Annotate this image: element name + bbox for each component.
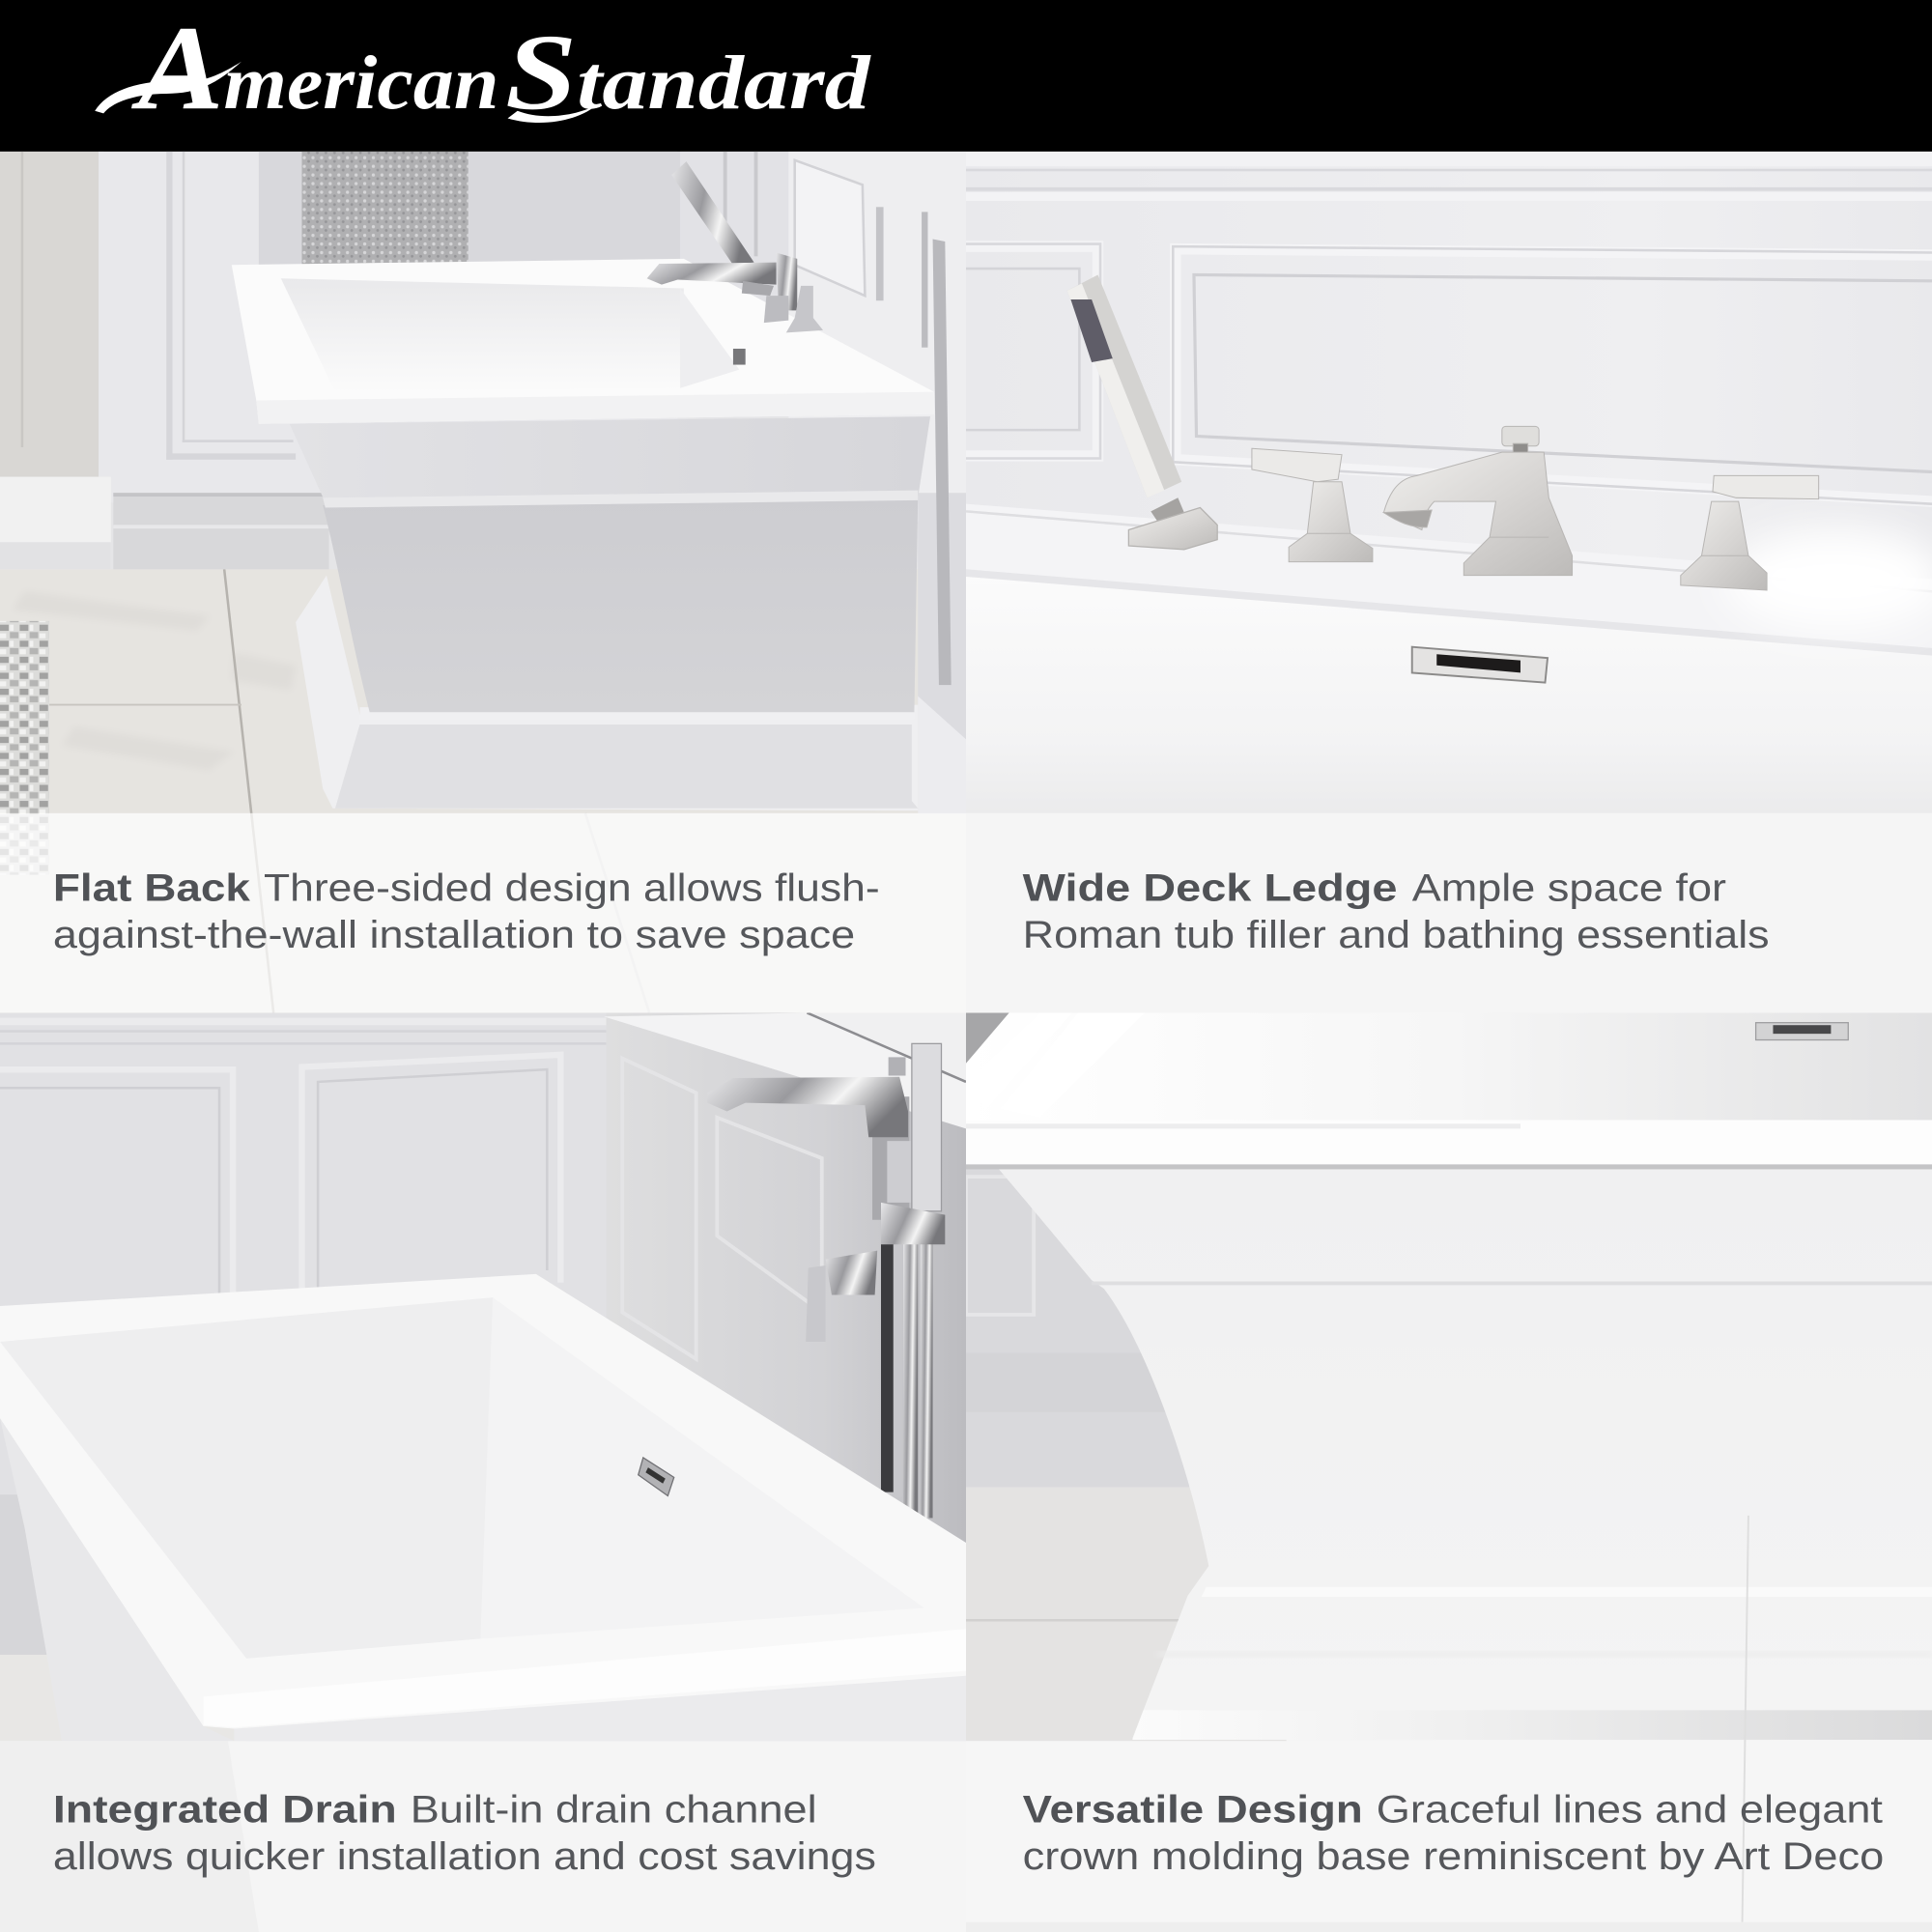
- step: [0, 477, 110, 542]
- caption: wide deck ledge: Roman tub filler and bathing essentials: [1023, 914, 1770, 956]
- mosaic border: [0, 621, 49, 875]
- caption: wide deck ledge: [1023, 867, 1770, 956]
- right handle: [1681, 475, 1819, 590]
- stone wall: [0, 152, 103, 477]
- drain: [733, 349, 746, 365]
- caption: integrated drain: Built-in drain channel: [411, 1788, 817, 1831]
- overflow drain: [1756, 1023, 1848, 1040]
- tub rim: [966, 1120, 1932, 1167]
- left floor and baseboard: [0, 1495, 46, 1655]
- panel: versatile design: [966, 1012, 1932, 1932]
- hand shower: [1067, 274, 1217, 550]
- left handle: [1252, 448, 1373, 562]
- panel: flat back: [0, 152, 966, 1012]
- overflow drain: [1412, 647, 1548, 683]
- wall: [99, 151, 259, 477]
- crown moulding: [966, 152, 1932, 166]
- caption: wide deck ledge: Ample space for: [1412, 867, 1726, 909]
- caption: wide deck ledge: Wide Deck Ledge: [1023, 867, 1397, 909]
- caption: flat back: Three-sided design allows flush-: [264, 867, 880, 909]
- American Standard logo: American: [130, 2, 499, 135]
- right wainscot: [680, 151, 788, 262]
- side wall: [671, 1012, 966, 1543]
- tub interior: [966, 1012, 1932, 1126]
- tub rim: [232, 259, 933, 400]
- caption: versatile design: [1023, 1788, 1884, 1878]
- caption background: [228, 1741, 966, 1932]
- towel: [301, 152, 469, 265]
- caption overlay: [0, 813, 966, 1012]
- background wall: [966, 1167, 1287, 1488]
- crown: [0, 1018, 607, 1025]
- tub interior: [480, 1297, 924, 1638]
- back wall panels: [0, 1055, 560, 1306]
- caption: flat back: [53, 867, 880, 956]
- tub side: [17, 1494, 62, 1655]
- caption: versatile design: Graceful lines and elegant: [1377, 1788, 1883, 1831]
- tub interior: [281, 278, 684, 340]
- floor: [966, 1488, 1287, 1741]
- caption background: [966, 813, 1932, 1012]
- caption: integrated drain: [53, 1788, 876, 1878]
- caption: integrated drain: allows quicker installation and cost savings: [53, 1835, 876, 1878]
- wall panels: [966, 244, 1932, 504]
- tub body: [997, 1167, 1932, 1739]
- panel: integrated drain: [0, 1012, 966, 1932]
- caption: flat back: against-the-wall installation to save space: [53, 914, 855, 956]
- caption: integrated drain: Integrated Drain: [53, 1788, 397, 1831]
- American Standard logo: [95, 2, 871, 135]
- caption: versatile design: crown molding base reminiscent by Art Deco: [1023, 1835, 1884, 1878]
- floor-standing faucet: [707, 1043, 945, 1518]
- tub body base: [296, 576, 918, 810]
- panel: wide deck ledge: [966, 152, 1932, 1012]
- deck: [966, 504, 1932, 647]
- tub rim: [0, 1274, 966, 1729]
- floor: [0, 569, 966, 1012]
- black header band: [0, 0, 1932, 152]
- caption: versatile design: Versatile Design: [1023, 1788, 1363, 1831]
- drain: [639, 1458, 674, 1495]
- caption: flat back: Flat Back: [53, 867, 251, 909]
- spout: [1383, 426, 1573, 576]
- tub filler faucet: [647, 161, 823, 332]
- American Standard logo: Standard: [505, 13, 871, 132]
- baseboard: [113, 493, 329, 569]
- caption background: [966, 1741, 1932, 1932]
